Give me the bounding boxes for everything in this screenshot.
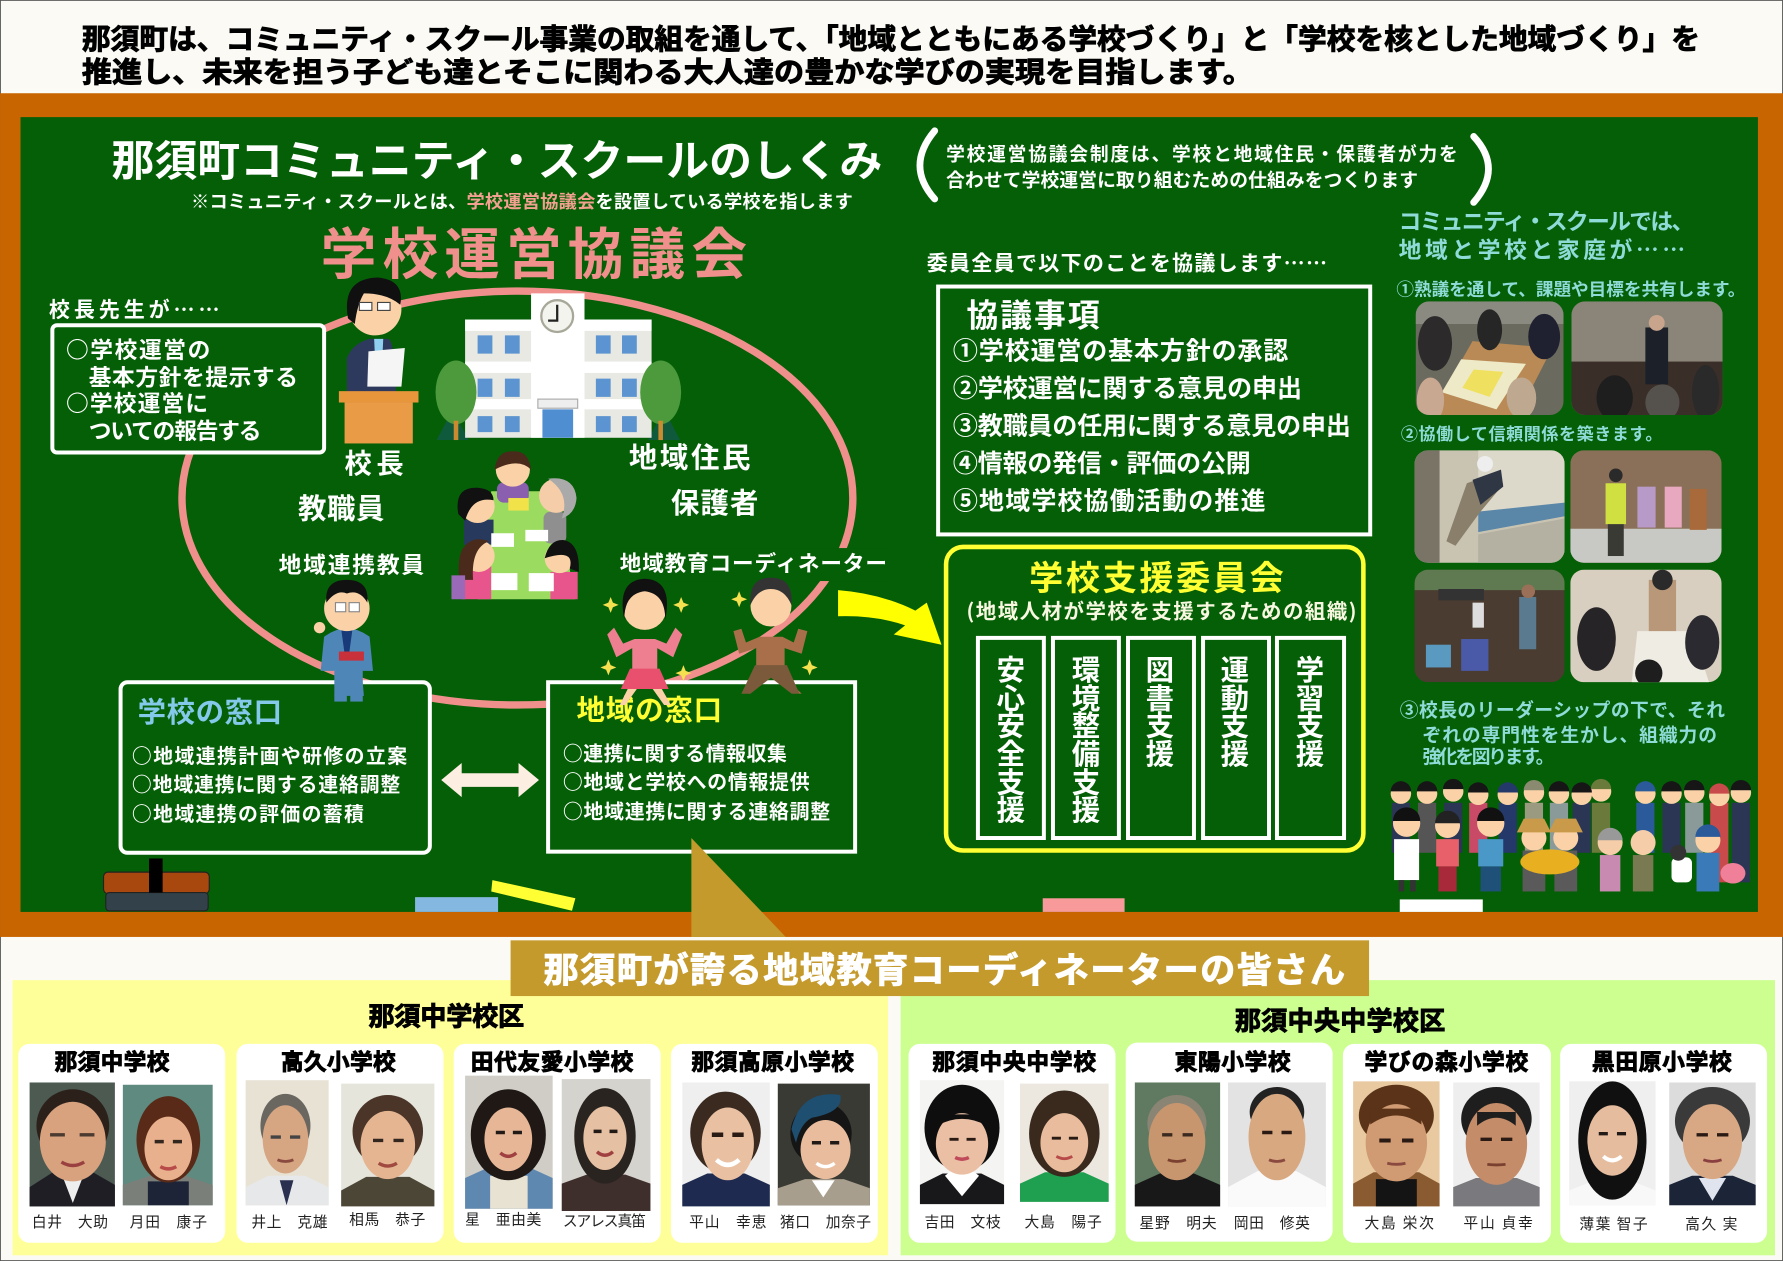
panel: discussion items: ②学校運営に関する意見の申出 <box>953 369 1302 405</box>
icon: council meeting <box>451 451 579 599</box>
label: items discussed: 委員全員で以下のことを協議します…… <box>927 248 1327 278</box>
text: point two: ②協働して信頼関係を築きます。 <box>1401 420 1662 445</box>
definition note: ※コミュニティ・スクールとは、学校運営協議会を設置している学校を指します <box>191 188 853 214</box>
panel: school support committee: 学校支援委員会 <box>1029 550 1284 600</box>
name: Soma: 相馬 恭子 <box>349 1209 426 1230</box>
panel: discussion items: ①学校運営の基本方針の承認 <box>953 331 1288 367</box>
panel: school support committee <box>946 547 1363 851</box>
name: Hirayama: 平山 幸恵 <box>689 1211 767 1232</box>
name: Inokuchi: 猪口 加奈子 <box>780 1211 871 1232</box>
icon: eraser <box>104 858 209 911</box>
intro statement: 推進し、未来を担う子ども達とそこに関わる大人達の豊かな学びの実現を目指します。 <box>82 50 1253 91</box>
label: principal introduction: 校長先生が…… <box>49 294 219 324</box>
panel: school support committee: 運動支援 <box>1221 648 1249 773</box>
panel: school contact <box>121 682 430 853</box>
name: Tsukida: 月田 康子 <box>130 1211 207 1232</box>
name: Okada: 岡田 修英 <box>1234 1212 1310 1233</box>
photo: Yoshida <box>920 1080 1004 1204</box>
card: Tashiro Yuai ES: 田代友愛小学校 <box>471 1044 634 1077</box>
panel: community contact: 地域の窓口 <box>577 688 722 729</box>
photo: Suarez <box>562 1079 650 1211</box>
text: point three: ③校長のリーダーシップの下で、それ <box>1400 695 1725 722</box>
banner: proud coordinators: 那須町が誇る地域教育コーディネーターの皆さん <box>544 942 1345 993</box>
photo: Hoshino <box>1135 1082 1220 1206</box>
panel: school support committee: 環境整備支援 <box>1072 648 1100 829</box>
name: Hirayama S: 平山 貞幸 <box>1463 1212 1533 1233</box>
panel: school contact: ○地域連携の評価の蓄積 <box>132 798 364 827</box>
panel: school support committee: 図書支援 <box>1146 648 1174 773</box>
photo: Tsukida <box>123 1085 213 1205</box>
photo: Hoshi <box>465 1076 553 1209</box>
photo: Hirayama S <box>1453 1082 1540 1206</box>
photo: Inokuchi <box>778 1084 870 1205</box>
name: Hoshi: 星 亜由美 <box>465 1209 542 1230</box>
heading: school council: 学校運営協議会 <box>321 210 747 291</box>
panel: principal duties <box>52 325 324 453</box>
card: Nasu JHS: 那須中学校 <box>55 1044 170 1077</box>
icon: liaison teacher <box>314 580 373 702</box>
text: point three: ぞれの専門性を生かし、組織力の <box>1423 720 1717 747</box>
name: Oshima E: 大島 栄次 <box>1365 1212 1434 1233</box>
panel: Nasu Chuo junior high district <box>901 980 1775 1255</box>
icon: white chalk <box>1400 899 1483 912</box>
heading: in community schools <box>1399 204 1694 265</box>
name: Takaku M: 高久 実 <box>1685 1213 1738 1234</box>
label: teachers: 教職員 <box>298 486 384 527</box>
blackboard <box>21 117 1758 912</box>
icon: coordinator woman <box>600 579 691 705</box>
photo: classroom activity <box>1570 570 1722 687</box>
label: community coordinator: 地域教育コーディネーター <box>620 547 887 578</box>
panel: school support committee: (地域人材が学校を支援するための組織) <box>967 595 1357 625</box>
heading: in community schools: コミュニティ・スクールでは、 <box>1399 204 1694 237</box>
label: guardians: 保護者 <box>671 481 758 522</box>
panel: discussion items <box>938 287 1370 534</box>
council description in parentheses: 合わせて学校運営に取り組むための仕組みをつくります <box>946 165 1418 192</box>
panel: school contact: 学校の窓口 <box>138 690 282 731</box>
panel: Nasu junior high district <box>13 980 888 1255</box>
photo: Takaku M <box>1669 1082 1756 1205</box>
name: Hoshino: 星野 明夫 <box>1139 1212 1217 1233</box>
label: principal: 校長 <box>345 441 404 481</box>
card: Takaku ES: 高久小学校 <box>281 1044 396 1077</box>
photo: Usui <box>30 1082 115 1206</box>
icon: pink chalk <box>1043 898 1125 912</box>
panel: community contact: ○地域連携に関する連絡調整 <box>563 796 830 825</box>
card: Toyo ES <box>1126 1043 1333 1242</box>
council description in parentheses <box>920 131 1488 202</box>
arrow: coordinator to support committee <box>838 590 942 645</box>
council ellipse <box>182 291 853 705</box>
photo: Usuba <box>1569 1081 1656 1205</box>
text: point one: ①熟議を通して、課題や目標を共有します。 <box>1396 277 1745 302</box>
panel: discussion items: ⑤地域学校協働活動の推進 <box>953 481 1266 517</box>
card: Nasu Kogen ES: 那須高原小学校 <box>691 1044 854 1077</box>
card: Kurodahara ES: 黒田原小学校 <box>1592 1044 1732 1077</box>
panel: Nasu junior high district: 那須中学校区 <box>368 996 524 1034</box>
photo: Okada <box>1228 1082 1326 1206</box>
text: point three: 強化を図ります。 <box>1423 742 1554 769</box>
label: local residents: 地域住民 <box>629 435 751 476</box>
panel: discussion items: ③教職員の任用に関する意見の申出 <box>953 406 1351 442</box>
panel: community contact: ○地域と学校への情報提供 <box>563 766 810 795</box>
card: Nasu Chuo JHS <box>909 1044 1116 1243</box>
council description in parentheses: 学校運営協議会制度は、学校と地域住民・保護者が力を <box>946 139 1458 166</box>
card: Takaku ES <box>237 1044 443 1243</box>
name: Oshima Y: 大島 陽子 <box>1025 1211 1102 1232</box>
name: Suarez: スアレス真笛 <box>563 1210 646 1231</box>
gold pointer <box>691 838 786 937</box>
label: community liaison teacher: 地域連携教員 <box>279 547 424 580</box>
photo: wall repair <box>1415 450 1565 563</box>
photo: presentation room <box>1571 301 1723 421</box>
panel: Nasu Chuo junior high district: 那須中央中学校区 <box>1235 1000 1445 1038</box>
arrow: two-way link between contacts <box>441 763 539 797</box>
icon: school building <box>436 293 681 440</box>
icon: blue chalk <box>415 897 498 912</box>
photo: Soma <box>341 1084 434 1206</box>
photo: Hirayama <box>682 1082 770 1206</box>
card: Toyo ES: 東陽小学校 <box>1175 1044 1291 1077</box>
intro statement <box>82 17 1700 91</box>
panel: community contact <box>548 682 855 852</box>
blackboard frame <box>0 93 1783 937</box>
photo: Oshima Y <box>1020 1084 1109 1202</box>
panel: school contact: ○地域連携に関する連絡調整 <box>132 768 400 797</box>
illustration: community members <box>1391 779 1751 891</box>
panel: school contact: ○地域連携計画や研修の立案 <box>132 740 407 769</box>
icon: principal at podium <box>339 277 418 443</box>
name: Yoshida: 吉田 文枝 <box>924 1211 1001 1232</box>
card: Kurodahara ES <box>1560 1044 1767 1243</box>
panel: discussion items: ④情報の発信・評価の公開 <box>953 444 1251 480</box>
panel: principal duties: ○学校運営の <box>66 332 210 365</box>
panel: school support committee: 安心安全支援 <box>997 648 1025 829</box>
icon: coordinator man <box>731 578 818 694</box>
photo: Oshima E <box>1353 1081 1440 1206</box>
panel: discussion items: 協議事項 <box>967 290 1100 336</box>
panel: school support committee: 学習支援 <box>1296 648 1324 773</box>
card: Nasu Kogen ES <box>671 1044 878 1243</box>
name: Usuba: 薄葉 智子 <box>1579 1213 1648 1234</box>
card: Nasu JHS <box>18 1044 225 1243</box>
photo: Inoue <box>246 1080 329 1205</box>
card: Manabi no Mori ES <box>1343 1044 1551 1243</box>
name: Inoue: 井上 克雄 <box>251 1211 328 1232</box>
card: Tashiro Yuai ES <box>454 1044 661 1243</box>
text: point three <box>1400 695 1725 769</box>
panel: principal duties: 基本方針を提示する <box>89 359 298 392</box>
name: Usui: 白井 大助 <box>32 1211 108 1232</box>
card: Manabi no Mori ES: 学びの森小学校 <box>1365 1044 1529 1077</box>
card: Nasu Chuo JHS: 那須中央中学校 <box>932 1044 1096 1077</box>
icon: yellow chalk <box>491 880 575 911</box>
panel: principal duties: ○学校運営に <box>66 386 208 419</box>
panel: principal duties: ついての報告する <box>89 413 262 446</box>
photo: field work <box>1415 570 1565 682</box>
photo: workshop table <box>1416 301 1564 423</box>
heading: in community schools: 地域と学校と家庭が…… <box>1399 232 1685 265</box>
panel: community contact: ○連携に関する情報収集 <box>563 738 787 767</box>
photo: crossing patrol <box>1570 450 1722 563</box>
main title: 那須町コミュニティ・スクールのしくみ <box>111 127 882 189</box>
intro statement: 那須町は、コミュニティ・スクール事業の取組を通して、「地域とともにある学校づくり」と「学校を核とした地域づくり」を <box>82 17 1700 58</box>
